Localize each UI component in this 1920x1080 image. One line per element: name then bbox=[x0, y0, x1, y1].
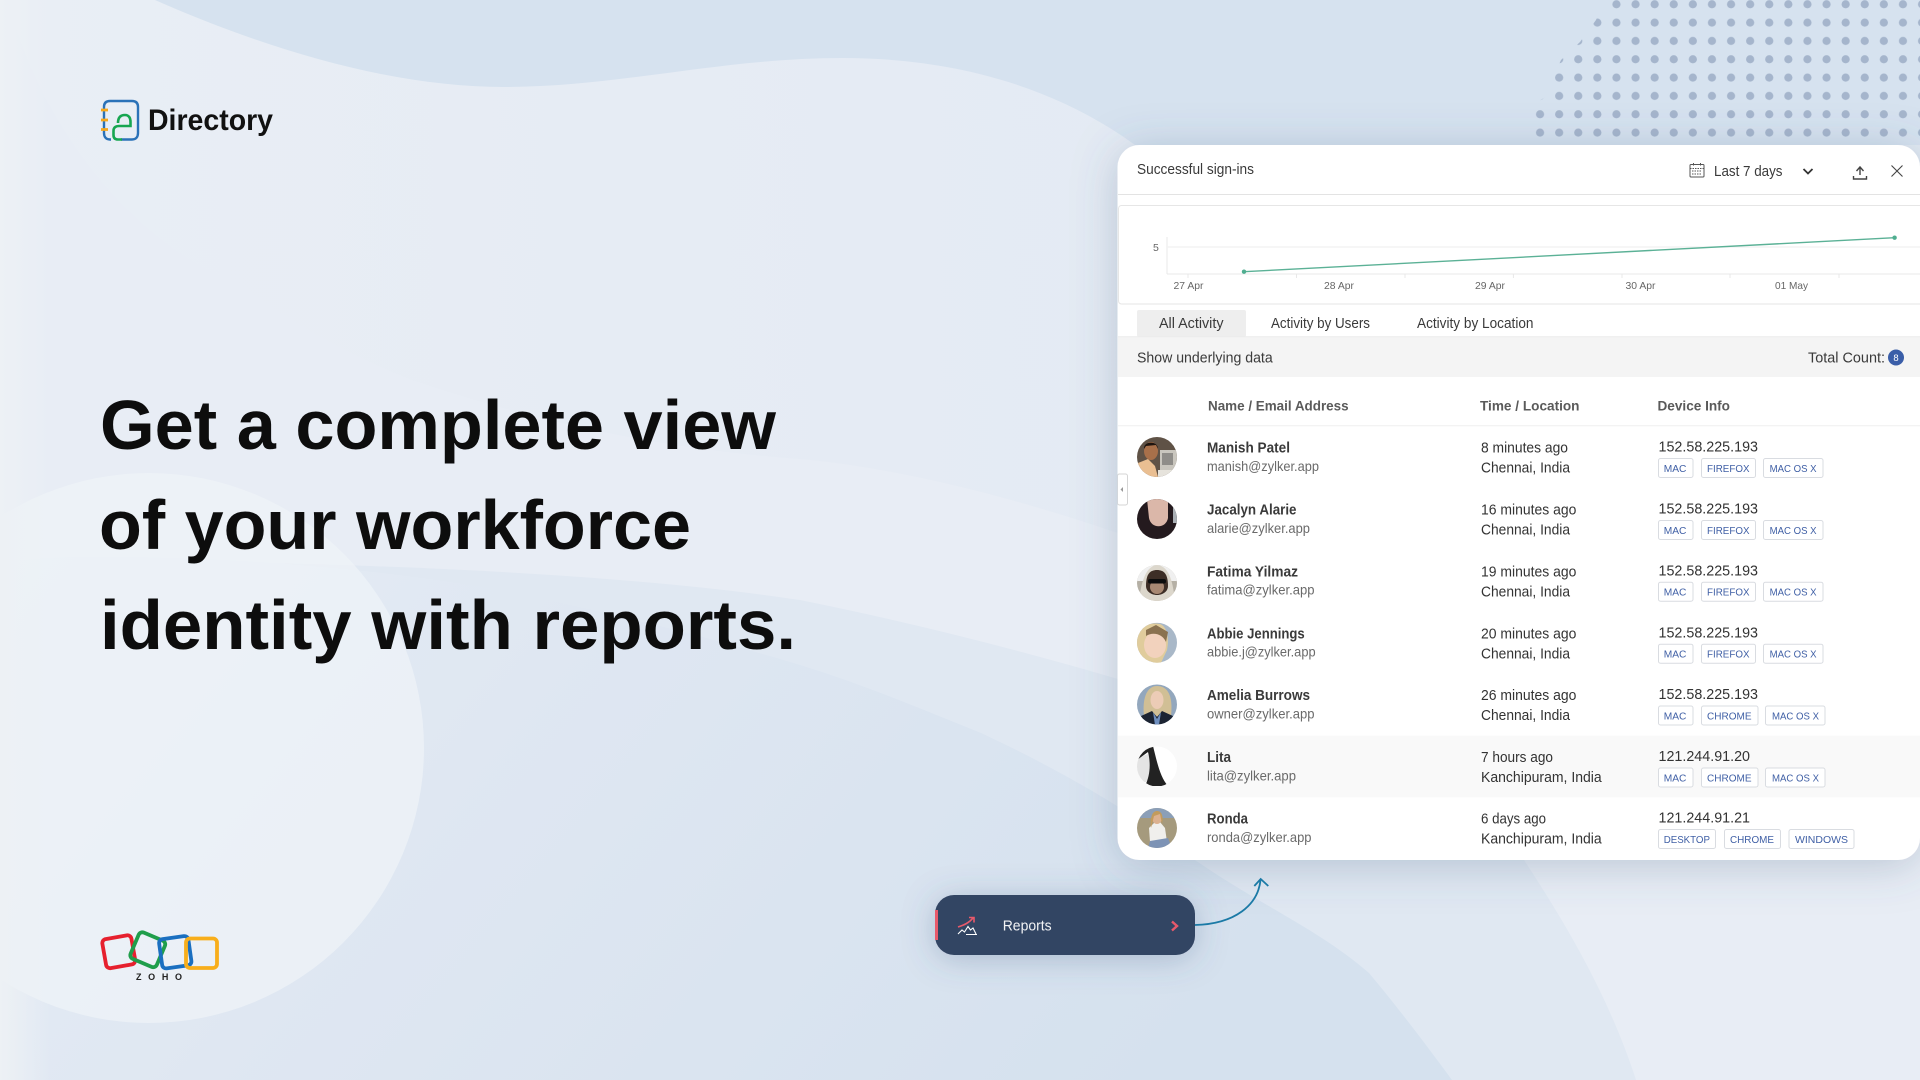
line chart bbox=[1118, 206, 1920, 304]
icon: reports chart bbox=[958, 918, 977, 934]
table header: Time / Location bbox=[1480, 398, 1580, 414]
table row: Lita (highlighted): 7 hours ago bbox=[1481, 750, 1553, 766]
underlying data bar: 8 bbox=[1893, 353, 1899, 364]
panel header: Last 7 days bbox=[1714, 164, 1782, 180]
table row: Fatima Yilmaz: MAC bbox=[1664, 587, 1687, 599]
avatar bbox=[1137, 623, 1177, 665]
avatar bbox=[1137, 746, 1166, 786]
underlying data bar bbox=[1118, 337, 1920, 377]
avatar bbox=[1137, 808, 1177, 848]
table row: Jacalyn Alarie: MAC OS X bbox=[1770, 525, 1817, 537]
headline: Get a complete view bbox=[100, 386, 777, 464]
table row: Manish Patel: 152.58.225.193 bbox=[1658, 440, 1758, 456]
table row: Amelia Burrows: Amelia Burrows bbox=[1207, 688, 1310, 704]
table row: Abbie Jennings: MAC bbox=[1664, 649, 1687, 661]
line chart: 28 Apr bbox=[1324, 280, 1354, 292]
panel header bbox=[1118, 162, 1920, 194]
icon: dropdown chevron bbox=[1804, 169, 1812, 174]
tabs bbox=[1137, 310, 1534, 337]
line chart: 01 May bbox=[1775, 280, 1809, 292]
icon: export bbox=[1854, 167, 1866, 179]
table row: Manish Patel: Manish Patel bbox=[1207, 441, 1290, 457]
tabs: Activity by Users bbox=[1271, 316, 1370, 332]
icon: directory book bbox=[101, 101, 138, 140]
table row: Ronda: WINDOWS bbox=[1795, 834, 1848, 846]
table row: Ronda: 6 days ago bbox=[1481, 812, 1546, 828]
table header bbox=[1118, 398, 1920, 426]
arrow: reports to panel bbox=[1195, 879, 1268, 925]
table row: Abbie Jennings: 20 minutes ago bbox=[1481, 626, 1576, 642]
headline bbox=[99, 386, 796, 664]
panel: successful sign-ins report bbox=[1118, 145, 1920, 860]
table row: Fatima Yilmaz: Fatima Yilmaz bbox=[1207, 564, 1298, 580]
table row: Manish Patel: FIREFOX bbox=[1707, 463, 1750, 475]
table row: Manish Patel: MAC OS X bbox=[1770, 463, 1817, 475]
icon: chevron bbox=[1172, 922, 1177, 930]
headline: of your workforce bbox=[99, 486, 691, 564]
table row: Fatima Yilmaz bbox=[1137, 563, 1823, 601]
avatar bbox=[1137, 437, 1177, 477]
table row: Amelia Burrows: 26 minutes ago bbox=[1481, 688, 1576, 704]
table row: Lita (highlighted): MAC bbox=[1664, 772, 1687, 784]
table row: Manish Patel: MAC bbox=[1664, 463, 1687, 475]
table header: Name / Email Address bbox=[1208, 398, 1349, 414]
table row: Jacalyn Alarie: Jacalyn Alarie bbox=[1207, 503, 1296, 519]
table row: Abbie Jennings: abbie.j@zylker.app bbox=[1207, 644, 1316, 660]
table row: Lita (highlighted): MAC OS X bbox=[1772, 772, 1819, 784]
table row: Fatima Yilmaz: 152.58.225.193 bbox=[1658, 563, 1758, 579]
table row: Ronda: Kanchipuram, India bbox=[1481, 832, 1603, 848]
table row: Ronda: 121.244.91.21 bbox=[1658, 811, 1750, 827]
table row: Abbie Jennings: MAC OS X bbox=[1770, 649, 1817, 661]
table row: Amelia Burrows: Chennai, India bbox=[1481, 708, 1571, 724]
icon: close bbox=[1892, 166, 1902, 176]
table row: Jacalyn Alarie: Chennai, India bbox=[1481, 523, 1571, 539]
table row: Lita (highlighted) bbox=[1137, 746, 1826, 788]
table header: Device Info bbox=[1658, 398, 1730, 414]
table row: Ronda bbox=[1137, 808, 1854, 848]
table row: Fatima Yilmaz: 19 minutes ago bbox=[1481, 564, 1576, 580]
underlying data bar: Total Count: bbox=[1808, 351, 1885, 367]
table row: Abbie Jennings bbox=[1137, 623, 1823, 665]
table row: Fatima Yilmaz: FIREFOX bbox=[1707, 587, 1750, 599]
table row: Jacalyn Alarie: FIREFOX bbox=[1707, 525, 1750, 537]
logo: Directory bbox=[101, 101, 273, 140]
button: Reports: Reports bbox=[1003, 918, 1052, 935]
table row: Lita (highlighted): Kanchipuram, India bbox=[1481, 770, 1603, 786]
logo: Zoho bbox=[102, 931, 217, 982]
table row: Ronda: DESKTOP bbox=[1664, 834, 1710, 846]
table row: Fatima Yilmaz: MAC OS X bbox=[1770, 587, 1817, 599]
table row: Manish Patel: Chennai, India bbox=[1481, 461, 1571, 477]
table row: Amelia Burrows: owner@zylker.app bbox=[1207, 706, 1315, 722]
tabs: All Activity bbox=[1159, 316, 1224, 332]
table row: Lita (highlighted): Lita bbox=[1207, 750, 1232, 766]
table row: Abbie Jennings: Chennai, India bbox=[1481, 646, 1571, 662]
panel header: Successful sign-ins bbox=[1137, 162, 1254, 178]
table row: Lita (highlighted): 121.244.91.20 bbox=[1658, 749, 1750, 765]
table row: Amelia Burrows: MAC OS X bbox=[1772, 710, 1819, 722]
icon: calendar bbox=[1690, 163, 1704, 177]
table row: Jacalyn Alarie bbox=[1137, 499, 1823, 540]
table row: Lita (highlighted): CHROME bbox=[1707, 772, 1752, 784]
avatar bbox=[1137, 565, 1177, 601]
table row: Ronda: ronda@zylker.app bbox=[1207, 829, 1312, 845]
logo: Zoho: ZOHO bbox=[136, 972, 182, 982]
table row: Amelia Burrows: 152.58.225.193 bbox=[1658, 687, 1758, 703]
tabs: Activity by Location bbox=[1417, 316, 1534, 332]
table row: Ronda: CHROME bbox=[1730, 834, 1774, 846]
table row: Fatima Yilmaz: Chennai, India bbox=[1481, 584, 1571, 600]
line chart: 5 bbox=[1153, 242, 1159, 254]
headline: identity with reports. bbox=[100, 586, 796, 664]
line chart: 30 Apr bbox=[1626, 280, 1656, 292]
button: Reports bbox=[935, 895, 1195, 955]
table row: Amelia Burrows bbox=[1137, 684, 1825, 725]
avatar bbox=[1137, 499, 1177, 539]
table row: Abbie Jennings: 152.58.225.193 bbox=[1658, 625, 1758, 641]
table row: Abbie Jennings: Abbie Jennings bbox=[1207, 626, 1305, 642]
line chart: 27 Apr bbox=[1174, 280, 1204, 292]
table row: Lita (highlighted): lita@zylker.app bbox=[1207, 768, 1296, 784]
table row: Amelia Burrows: CHROME bbox=[1707, 710, 1752, 722]
sidebar collapse handle bbox=[1118, 474, 1128, 505]
table row: Manish Patel bbox=[1137, 437, 1823, 478]
table row: Manish Patel: 8 minutes ago bbox=[1481, 441, 1568, 457]
table row: Manish Patel: manish@zylker.app bbox=[1207, 458, 1319, 474]
table row: Jacalyn Alarie: 152.58.225.193 bbox=[1658, 502, 1758, 518]
dot pattern bbox=[1520, 0, 1920, 145]
table row: Amelia Burrows: MAC bbox=[1664, 710, 1687, 722]
avatar bbox=[1137, 684, 1177, 725]
table row: Fatima Yilmaz: fatima@zylker.app bbox=[1207, 582, 1315, 598]
underlying data bar: Show underlying data bbox=[1137, 351, 1274, 367]
table row: Abbie Jennings: FIREFOX bbox=[1707, 649, 1750, 661]
table row: Ronda: Ronda bbox=[1207, 812, 1249, 828]
line chart: 29 Apr bbox=[1475, 280, 1505, 292]
table row: Jacalyn Alarie: 16 minutes ago bbox=[1481, 503, 1576, 519]
table row: Jacalyn Alarie: MAC bbox=[1664, 525, 1687, 537]
wordmark: Directory bbox=[148, 104, 273, 137]
table row: Jacalyn Alarie: alarie@zylker.app bbox=[1207, 520, 1310, 536]
